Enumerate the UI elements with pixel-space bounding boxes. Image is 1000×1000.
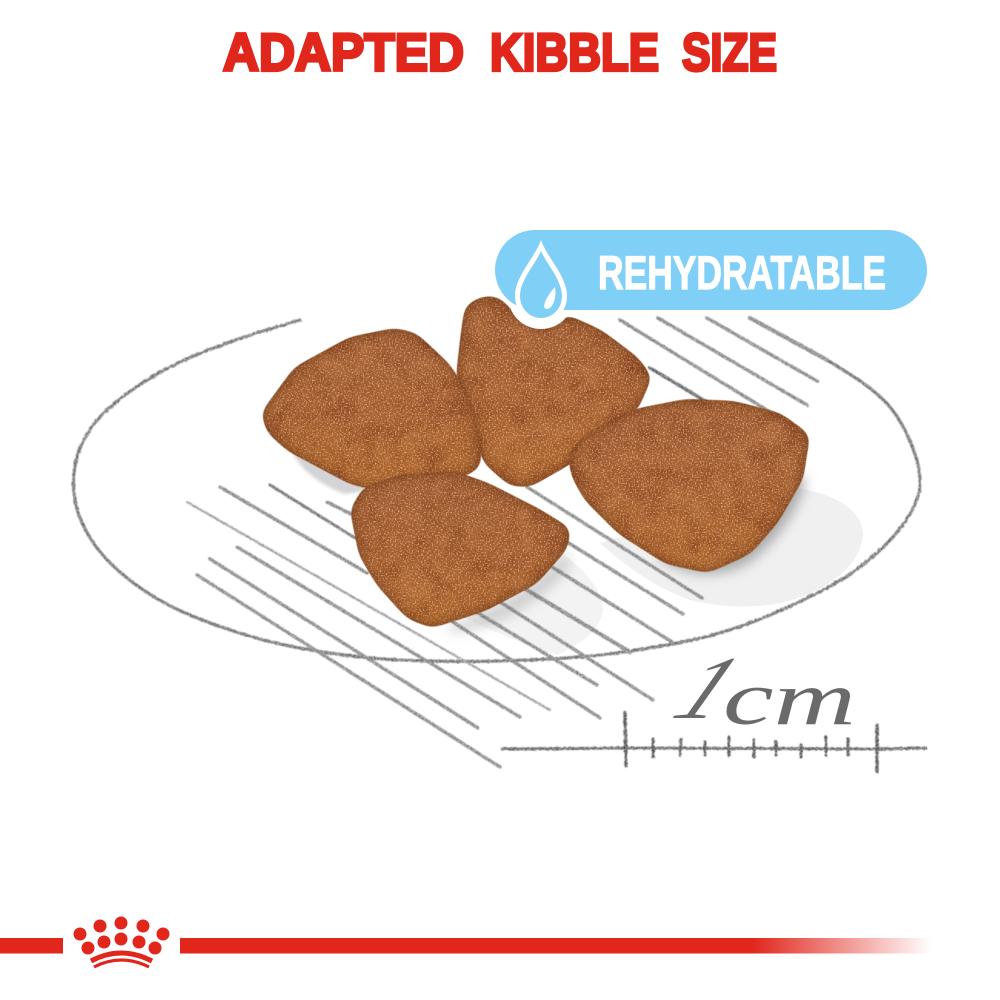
icon: water drop: [515, 240, 567, 323]
kibble: upper centre: [457, 297, 651, 486]
ruler end ticks: [625, 713, 877, 771]
title: ADAPTED: [223, 24, 464, 82]
hatching lower left: [187, 485, 702, 767]
scale label: 1: [659, 638, 757, 738]
hatching upper right: [620, 318, 827, 412]
footer bar left: [0, 938, 63, 954]
ruler line: [502, 748, 926, 749]
scale ruler: [502, 713, 926, 771]
kibble: upper left: [262, 329, 480, 488]
kibble: lower centre: [351, 472, 570, 627]
title: SIZE: [682, 24, 777, 82]
kibble shadows on plate: [290, 448, 863, 655]
scale label: [659, 638, 856, 740]
kibble pieces: [262, 297, 809, 627]
badge label: REHYDRATABLE: [598, 246, 886, 299]
logo: crown: [74, 916, 170, 967]
title: KIBBLE: [490, 24, 659, 82]
title: [223, 24, 777, 82]
plate outline: [74, 320, 920, 661]
footer bar right: [180, 938, 932, 954]
kibble: right: [569, 400, 809, 572]
drop halo: [508, 263, 574, 329]
rehydratable badge: [495, 230, 927, 329]
scale label: cm: [723, 657, 856, 740]
plate sketch with pencil hatching: [74, 318, 920, 767]
ruler minor ticks: [653, 737, 848, 757]
badge pill: [495, 230, 927, 310]
